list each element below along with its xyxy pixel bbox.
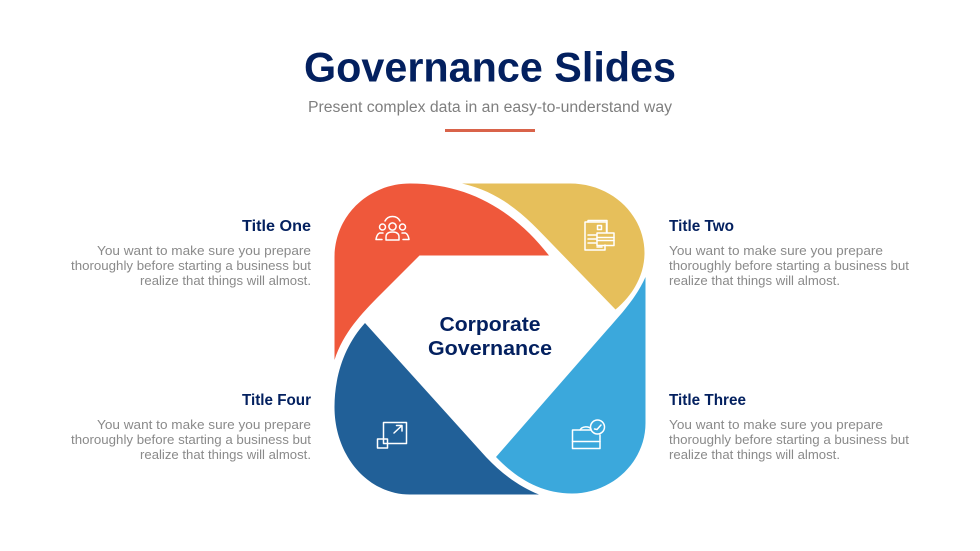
segment: red top-left [334,184,549,360]
text block: title two: You want to make sure you prepare [669,243,883,258]
diagram: corporate governance cycle [334,184,646,494]
text block: title three: Title Three [669,392,746,409]
text block: title two: thoroughly before starting a business but [669,258,909,273]
icon: documents and card [585,220,614,250]
text block: title four: Title Four [242,392,311,409]
segment: yellow top-right [462,184,644,310]
text block: title three: thoroughly before starting a business but [669,432,909,447]
center label: Corporate [440,314,540,336]
title: Governance Slides [304,44,676,90]
text block: title one: thoroughly before starting a business but [71,258,311,273]
icon: expand squares [378,422,406,448]
text block: title four [71,392,311,462]
icon: people group [376,216,409,240]
segment: light blue bottom-right [496,277,646,494]
text block: title four: thoroughly before starting a business but [71,432,311,447]
center label [428,314,552,360]
text block: title three: You want to make sure you prepare [669,417,883,432]
text block: title two [669,218,909,288]
text block: title one: Title One [242,218,311,235]
title underline accent [445,129,535,132]
text block: title three: realize that things will almost. [669,447,840,462]
icon: briefcase with clock [572,420,604,448]
text block: title one: realize that things will almost. [140,273,311,288]
segment: dark blue bottom-left [334,323,539,494]
text block: title two: realize that things will almost. [669,273,840,288]
text block: title three [669,392,909,462]
center label: Governance [428,338,552,360]
text block: title four: realize that things will almost. [140,447,311,462]
text block: title four: You want to make sure you prepare [97,417,311,432]
text block: title one [71,218,311,288]
text block: title one: You want to make sure you prepare [97,243,311,258]
subtitle: Present complex data in an easy-to-understand way [308,99,672,116]
text block: title two: Title Two [669,218,734,235]
